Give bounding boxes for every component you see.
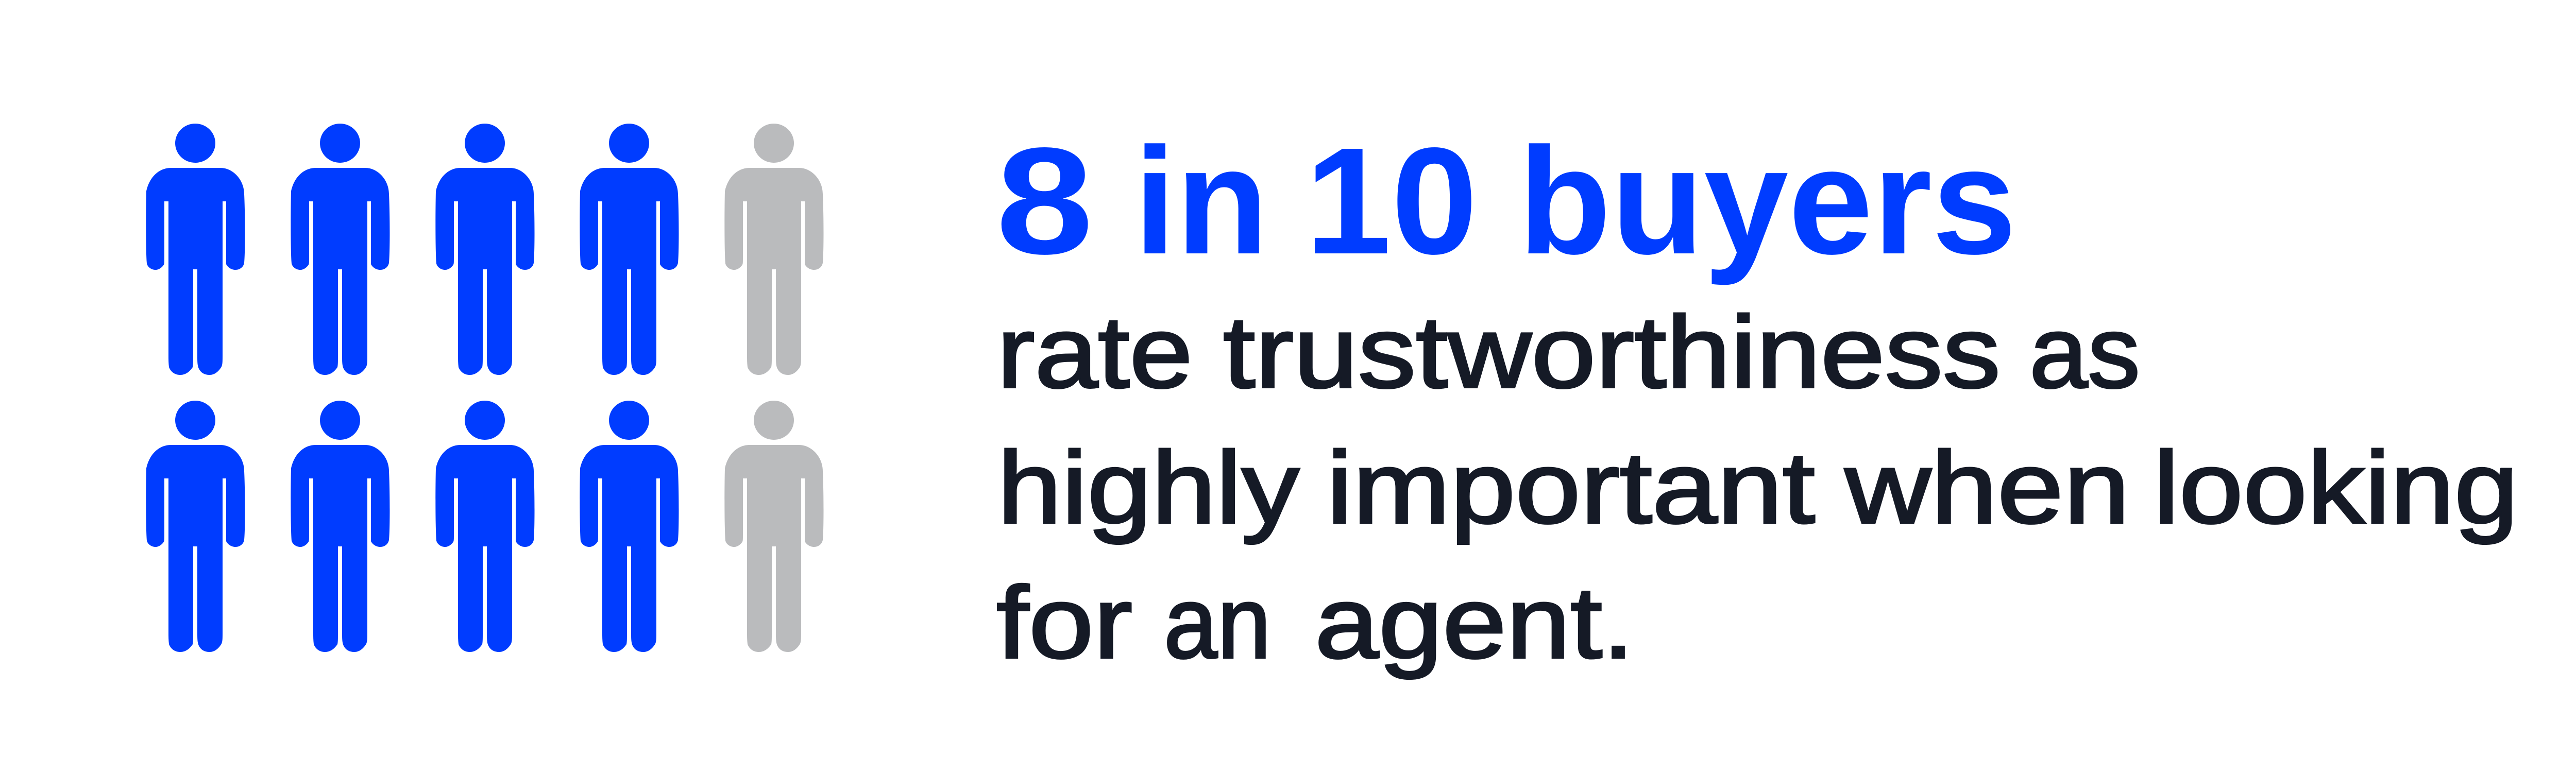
person 4 row 1 blue — [580, 124, 679, 375]
person 3 row 1 blue — [435, 124, 535, 375]
line 3: agent. — [1315, 565, 1634, 679]
person 2 row 2 blue — [291, 401, 389, 652]
line 2: important — [1327, 431, 1815, 544]
line 3: for — [996, 565, 1132, 679]
line 2: highly — [997, 431, 1299, 544]
line 1 — [997, 295, 2140, 409]
person 1 row 1 blue — [146, 124, 245, 375]
heading: in — [1134, 116, 1268, 286]
line 2 — [997, 431, 2518, 544]
person 2 row 1 blue — [291, 124, 389, 375]
heading: 10 — [1305, 116, 1478, 286]
line 1: rate — [997, 295, 1193, 409]
body text — [996, 295, 2518, 679]
line 2: when — [1844, 431, 2130, 544]
person 3 row 2 blue — [435, 401, 535, 652]
line 3 — [996, 565, 1634, 679]
person 5 row 2 gray — [724, 401, 823, 652]
heading: 8 — [996, 116, 1093, 286]
line 1: trustworthiness — [1223, 295, 2001, 409]
person 1 row 2 blue — [146, 401, 245, 652]
heading: buyers — [1518, 116, 2016, 287]
person 5 row 1 gray — [724, 124, 823, 375]
heading — [996, 116, 2016, 287]
line 2: looking — [2154, 431, 2518, 544]
pictogram: 8 of 10 people highlighted — [146, 124, 823, 652]
person 4 row 2 blue — [580, 401, 679, 652]
line 1: as — [2029, 295, 2140, 409]
line 3: an — [1164, 565, 1271, 679]
